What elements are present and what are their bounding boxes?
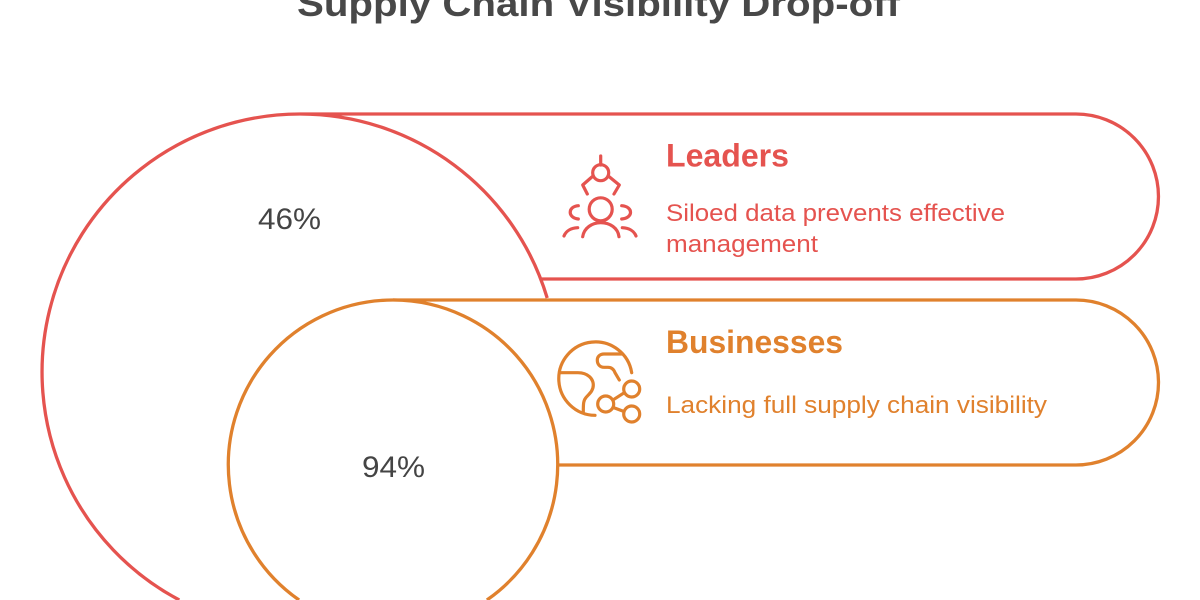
businesses outline: circle and pill	[228, 300, 1158, 600]
panel: businesses	[228, 300, 1158, 600]
leaders description: Siloed data prevents effective	[666, 200, 1005, 227]
leaders outline: circle and pill	[42, 114, 1158, 600]
businesses heading: Businesses	[666, 324, 843, 360]
leaders percentage: 46%	[258, 203, 321, 236]
panel: leaders	[42, 114, 1158, 600]
icon: connected globe	[559, 342, 640, 422]
icon: robotic claw over people	[564, 156, 636, 237]
businesses percentage: 94%	[362, 451, 425, 484]
leaders description: management	[666, 231, 818, 258]
businesses description: Lacking full supply chain visibility	[666, 392, 1047, 419]
leaders heading: Leaders	[666, 138, 789, 174]
